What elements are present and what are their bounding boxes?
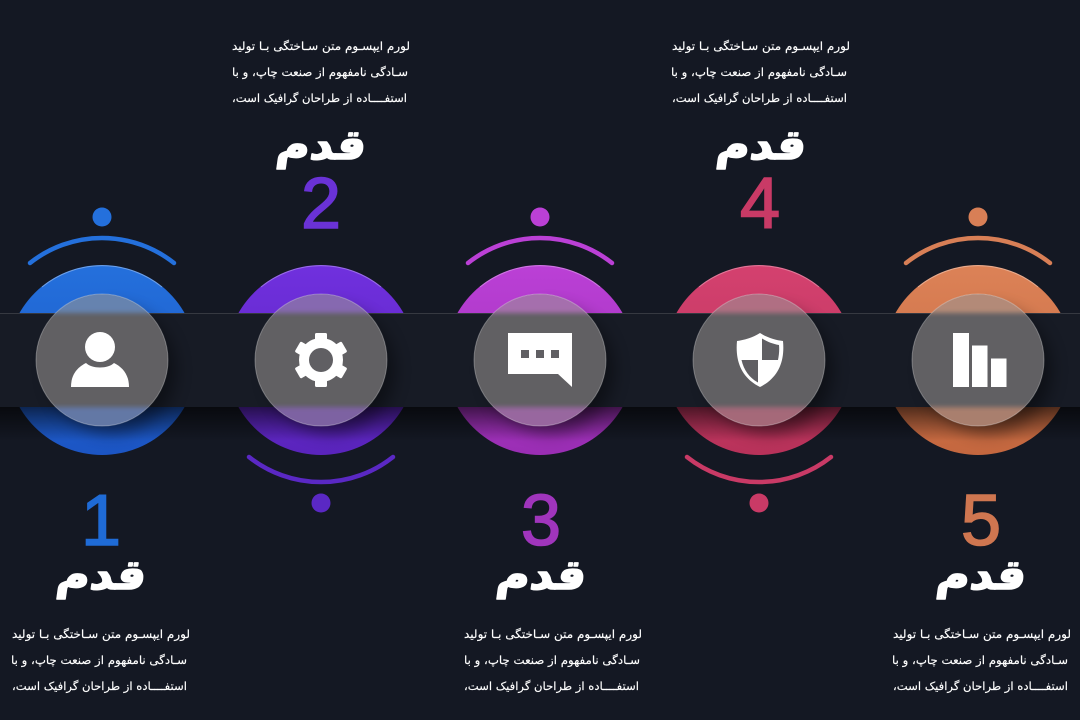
description: step 1: لورم ایپسـوم متن سـاختگی بـا تولید — [12, 627, 190, 642]
arc and dot: step 4 — [687, 457, 831, 512]
description: step 2: لورم ایپسـوم متن سـاختگی بـا تولید — [232, 39, 410, 54]
description: step 5: استفــــاده از طراحان گرافیک است، — [893, 679, 1068, 694]
icon: shield — [737, 333, 783, 387]
description: step 3 — [464, 627, 642, 694]
description: step 3: سـادگی نامفهوم از صنعت چاپ، و با — [464, 653, 640, 668]
description: step 2 — [232, 39, 410, 106]
description: step 5 — [892, 627, 1071, 694]
description: step 4: سـادگی نامفهوم از صنعت چاپ، و با — [671, 65, 847, 80]
description: step 4 — [671, 39, 850, 106]
step 2 — [229, 39, 419, 512]
title: step 2: قدم — [274, 122, 370, 169]
title: step 4: قدم — [714, 122, 810, 169]
icon: person — [71, 332, 129, 387]
number 2: 2 — [301, 164, 341, 244]
disc: step 2 — [226, 265, 416, 455]
description: step 5: سـادگی نامفهوم از صنعت چاپ، و با — [892, 653, 1068, 668]
description: step 4: لورم ایپسـوم متن سـاختگی بـا تولید — [672, 39, 850, 54]
icon: chat bubble — [508, 333, 572, 387]
step 5 — [886, 208, 1076, 694]
description: step 4: استفــــاده از طراحان گرافیک است، — [672, 91, 847, 106]
arc and dot: step 3 — [468, 208, 612, 263]
icon: bar chart — [953, 333, 1006, 387]
description: step 3: لورم ایپسـوم متن سـاختگی بـا تولید — [464, 627, 642, 642]
icon: gear — [295, 333, 347, 387]
arc and dot: step 2 — [249, 457, 393, 512]
disc: step 1 — [7, 265, 197, 455]
disc: step 3 — [445, 265, 635, 455]
step 4 — [667, 39, 857, 512]
description: step 1: استفــــاده از طراحان گرافیک است، — [12, 679, 187, 694]
horizontal band — [0, 313, 1080, 407]
number 5: 5 — [961, 481, 1001, 561]
title: step 1: قدم — [54, 552, 150, 599]
description: step 2: استفــــاده از طراحان گرافیک است، — [232, 91, 407, 106]
band shadow — [0, 407, 1080, 441]
description: step 5: لورم ایپسـوم متن سـاختگی بـا تولید — [893, 627, 1071, 642]
glass circle: step 3 — [474, 294, 612, 443]
step 3 — [448, 208, 642, 694]
glass circle: step 4 — [692, 294, 832, 443]
disc: step 4 — [664, 265, 854, 455]
glass circle: step 1 — [36, 294, 174, 443]
title: step 5: قدم — [934, 552, 1030, 599]
glass circle: step 5 — [912, 294, 1050, 443]
arc and dot: step 1 — [30, 208, 174, 263]
description: step 3: استفــــاده از طراحان گرافیک است، — [464, 679, 639, 694]
description: step 1: سـادگی نامفهوم از صنعت چاپ، و با — [11, 653, 187, 668]
arc and dot: step 5 — [906, 208, 1050, 263]
number 4: 4 — [740, 164, 780, 244]
description: step 1 — [11, 627, 190, 694]
number 3: 3 — [521, 481, 561, 561]
glass circle: step 2 — [254, 294, 394, 443]
step 1 — [10, 208, 200, 694]
disc: step 5 — [883, 265, 1073, 455]
description: step 2: سـادگی نامفهوم از صنعت چاپ، و با — [232, 65, 408, 80]
number 1: 1 — [81, 481, 121, 561]
title: step 3: قدم — [494, 552, 590, 599]
